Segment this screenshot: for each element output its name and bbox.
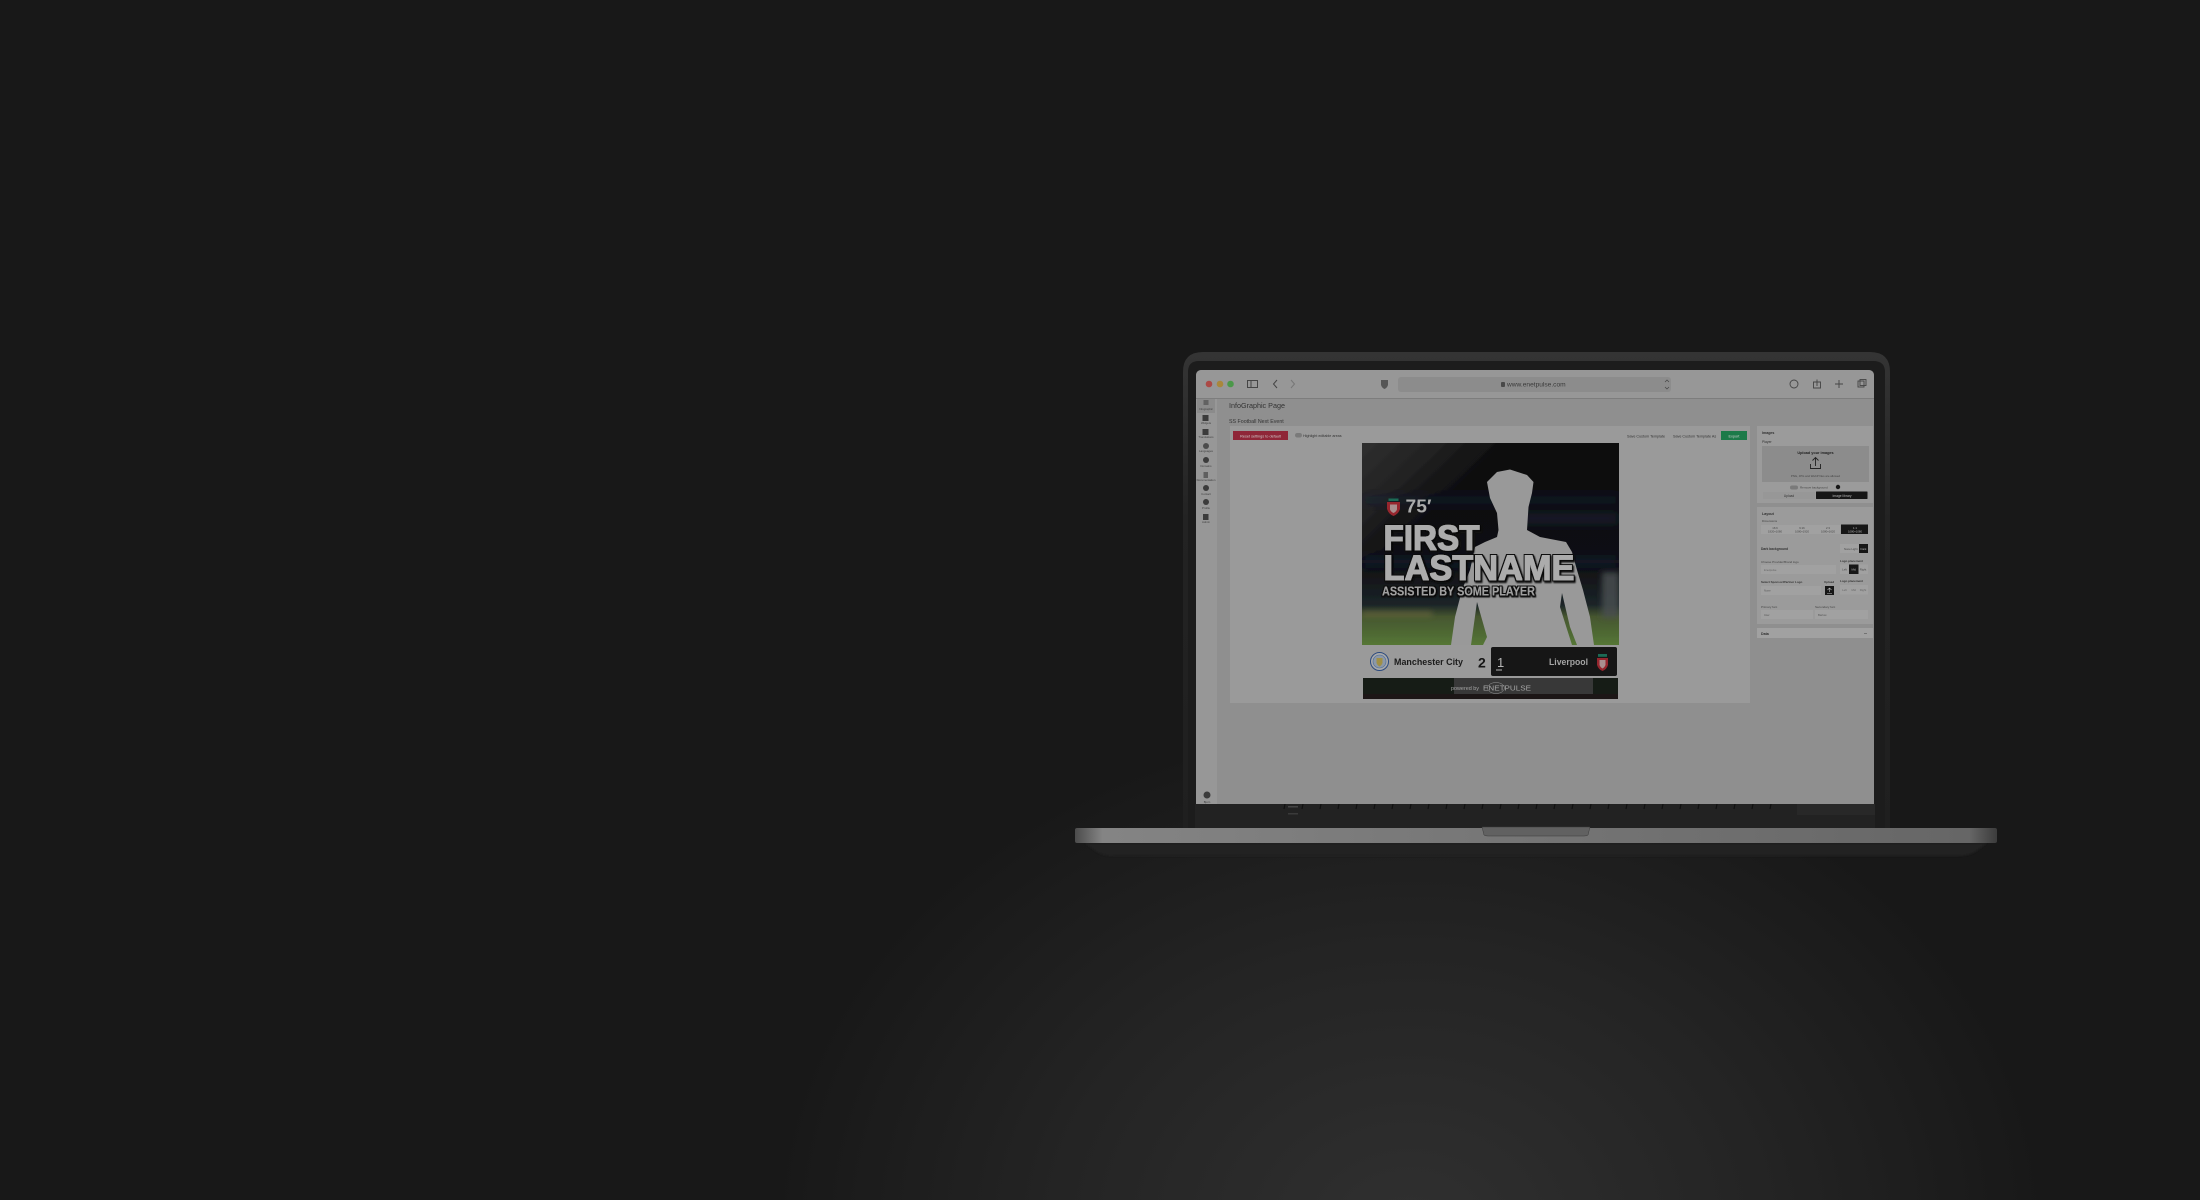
sponsor logo placement: Logo placement xyxy=(1840,579,1863,583)
images heading: Images xyxy=(1762,431,1774,435)
address bar xyxy=(1398,377,1671,392)
panel: data: Data xyxy=(1761,632,1770,636)
page subheading: SS Football Next Event xyxy=(1229,419,1284,425)
sponsor logo placement: Mid xyxy=(1851,588,1856,592)
provider logo option: Enetpulse xyxy=(1764,568,1777,572)
goal minute: 75′ xyxy=(1406,497,1432,517)
screen background xyxy=(1196,370,1874,804)
goal minute xyxy=(1387,497,1432,517)
away team name: Liverpool xyxy=(1549,657,1588,668)
provider logo option: Choose Provider/Brand logo xyxy=(1761,560,1799,564)
secondary font: Barlow xyxy=(1818,613,1828,617)
reset button xyxy=(1233,431,1288,440)
left navigation sidebar: Domains xyxy=(1200,464,1212,468)
away score: 1 xyxy=(1497,655,1504,670)
player heading: Player xyxy=(1762,440,1772,444)
primary font: Primary font xyxy=(1761,605,1777,609)
home team name: Manchester City xyxy=(1394,657,1464,668)
highlight toggle xyxy=(1295,433,1342,438)
icon: Manchester City crest xyxy=(1370,652,1388,670)
dark background option: Dark background xyxy=(1761,547,1788,551)
left navigation sidebar: Infographic xyxy=(1199,407,1214,411)
highlight toggle: Highlight editable areas xyxy=(1303,434,1342,438)
icon: Liverpool crest xyxy=(1387,498,1400,516)
logo placement: Logo placement xyxy=(1840,559,1863,563)
left navigation sidebar: Profile xyxy=(1202,506,1210,510)
left navigation sidebar: Languages xyxy=(1199,449,1214,453)
save template as button: Save Custom Template As xyxy=(1673,434,1716,438)
icon: sidebar toggle xyxy=(1248,380,1258,388)
save template button: Save Custom Template xyxy=(1627,434,1665,438)
powered by label: powered by xyxy=(1451,686,1479,692)
photo highlights xyxy=(1362,572,1619,618)
photo glare xyxy=(1362,443,1497,574)
panel: images xyxy=(1757,426,1873,503)
icon: Liverpool crest xyxy=(1597,654,1608,671)
secondary font: Secondary font xyxy=(1815,605,1835,609)
sponsor upload button: Upload xyxy=(1824,580,1834,584)
dark background option xyxy=(1761,544,1868,553)
editor panel xyxy=(1230,426,1750,703)
footer strip xyxy=(1363,678,1618,699)
logo placement: Mid xyxy=(1851,568,1856,572)
player silhouette xyxy=(1451,470,1594,645)
upload dropzone xyxy=(1762,446,1869,482)
dimension options: 1080×1080 xyxy=(1848,530,1862,534)
laptop base xyxy=(1075,828,1997,843)
home score: 2 xyxy=(1478,654,1486,670)
stadium photo xyxy=(1362,443,1619,645)
dark background option: Dark xyxy=(1861,547,1867,551)
dimension options: 1080×1920 xyxy=(1795,530,1809,534)
away team box xyxy=(1491,647,1617,676)
export button xyxy=(1721,431,1747,440)
dimension options: 1080×1620 xyxy=(1821,530,1835,534)
address bar: www.enetpulse.com xyxy=(1506,382,1566,388)
logo placement xyxy=(1840,559,1868,574)
image library button: Image library xyxy=(1832,494,1852,498)
keyboard reflection xyxy=(1195,804,1875,828)
provider logo option xyxy=(1761,560,1836,574)
base notch xyxy=(1482,827,1590,836)
bezel xyxy=(1188,361,1885,828)
dimension options: 16:9 xyxy=(1772,526,1778,530)
sponsor logo option: None xyxy=(1764,588,1771,592)
dark background option: None Light xyxy=(1844,547,1858,551)
dimension options: 1920×1080 xyxy=(1768,530,1782,534)
layout heading: Layout xyxy=(1762,512,1775,516)
reset button: Reset settings to default xyxy=(1240,434,1282,438)
panel: data xyxy=(1757,628,1873,638)
logo placement: Right xyxy=(1860,568,1866,572)
left navigation sidebar: Contact xyxy=(1201,492,1211,496)
dimension options: 2:3 xyxy=(1826,526,1830,530)
icon: back and forward chevrons xyxy=(1274,380,1294,388)
primary font: Inter xyxy=(1764,613,1770,617)
laptop mockup xyxy=(1075,352,1997,856)
left navigation sidebar: Translations xyxy=(1198,435,1214,439)
left navigation sidebar: Widgets xyxy=(1201,421,1212,425)
secondary font xyxy=(1815,605,1868,619)
sponsor logo placement: Right xyxy=(1860,588,1866,592)
dimension options: 1:1 xyxy=(1853,526,1857,530)
browser toolbar xyxy=(1196,370,1874,399)
upload button: Upload xyxy=(1784,494,1794,498)
left navigation sidebar: Documentation xyxy=(1197,478,1216,482)
laptop lid xyxy=(1183,352,1890,828)
laptop shadow xyxy=(1085,843,1987,856)
scoreboard xyxy=(1370,647,1617,676)
enetpulse logo: ENETPULSE xyxy=(1483,684,1531,692)
export button: Export xyxy=(1729,434,1740,438)
infographic preview xyxy=(1362,443,1619,699)
upload dropzone: Upload your images xyxy=(1797,451,1834,455)
dimension options: Dimensions xyxy=(1762,519,1778,523)
dimension options xyxy=(1761,519,1868,534)
dimension options: 9:16 xyxy=(1799,526,1805,530)
logo placement: Left xyxy=(1842,568,1847,572)
icon: privacy shield xyxy=(1381,380,1388,389)
blue stand lights xyxy=(1362,498,1619,565)
sponsor logo option: Select Sponsor/Partner Logo xyxy=(1761,580,1803,584)
remove background toggle: Remove background xyxy=(1800,486,1828,490)
browser screen xyxy=(1196,370,1874,804)
scorer last name: LASTNAME xyxy=(1384,549,1574,588)
panel: layout xyxy=(1757,507,1873,624)
left navigation sidebar: Admin xyxy=(1202,520,1210,524)
page heading: InfoGraphic Page xyxy=(1229,401,1285,410)
left navigation sidebar xyxy=(1196,399,1217,804)
sponsor logo option xyxy=(1761,580,1821,595)
assist line: ASSISTED BY SOME PLAYER xyxy=(1382,584,1536,598)
primary font xyxy=(1761,605,1813,619)
toolbar action icons xyxy=(1790,380,1866,388)
sponsor logo placement xyxy=(1840,579,1868,594)
traffic lights xyxy=(1206,381,1234,387)
sponsor logo placement: Left xyxy=(1842,588,1847,592)
upload dropzone: PNG, JPG and WebP files are allowed xyxy=(1791,474,1841,478)
scorer first name: FIRST xyxy=(1384,519,1480,558)
left navigation sidebar: Bjorn xyxy=(1204,800,1211,804)
